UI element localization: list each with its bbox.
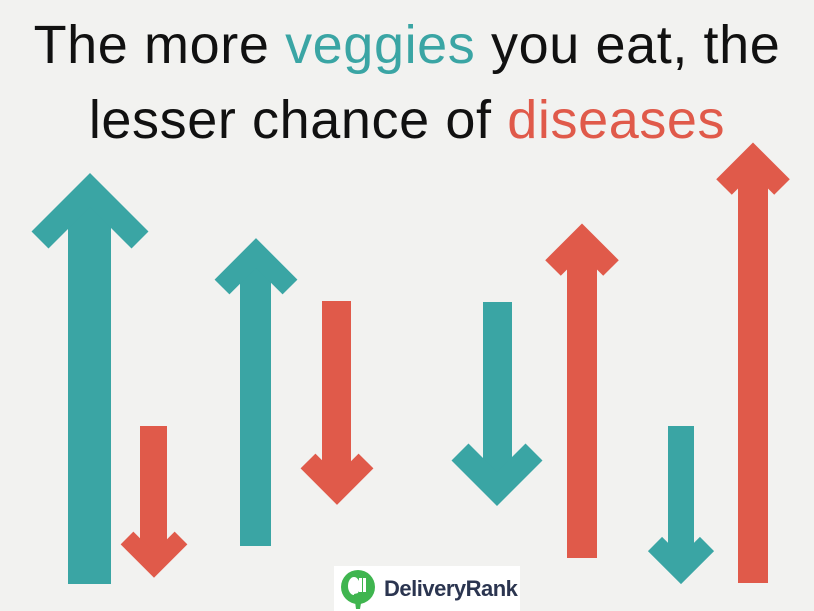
arrow: red up 3 [553,239,611,558]
icon: green spoon fork [341,570,375,609]
title [34,15,780,150]
arrow: teal up 1 [40,190,140,584]
logo: DeliveryRank [334,566,520,611]
arrow: red down 2 [308,301,366,490]
arrow: teal down 4 [655,426,707,570]
arrow: teal up 2 [222,253,290,546]
arrow: teal down 3 [460,302,534,489]
title: lesser chance of diseases [89,90,725,150]
logo text: DeliveryRank [384,576,517,601]
arrow: red down 1 [127,426,181,565]
arrow: red up 4 [724,158,782,583]
title: The more veggies you eat, the [34,15,780,75]
